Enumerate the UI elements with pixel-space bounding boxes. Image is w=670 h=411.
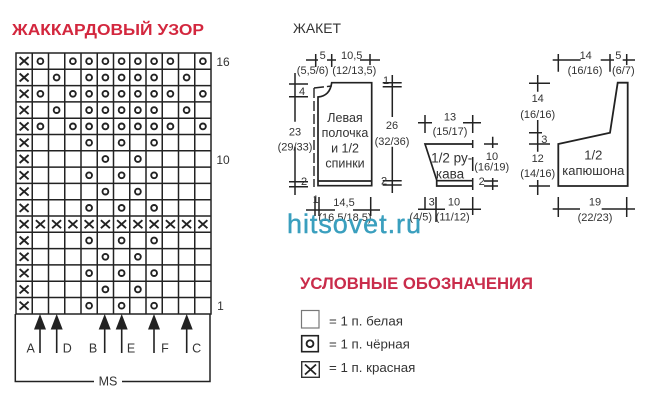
diagram: half hood: [520, 50, 635, 224]
panel dimension labels: 10,5: [341, 50, 362, 62]
hood dimension labels: (16/16): [520, 109, 555, 121]
panel dimension labels: 23: [289, 126, 301, 138]
panel dimensions: [289, 54, 402, 216]
hood dimension labels: 5: [615, 50, 621, 62]
panel label: и 1/2: [331, 142, 359, 156]
heading: legend: УСЛОВНЫЕ ОБОЗНАЧЕНИЯ: [300, 275, 533, 293]
arrows A-F: [27, 314, 201, 356]
sleeve dimension labels: 10: [486, 151, 498, 163]
watermark: hitsovet.ru: hitsovet.ru: [287, 209, 421, 239]
hood dimension labels: 14: [580, 50, 592, 62]
panel dimension labels: 5: [320, 50, 326, 62]
panel dimension labels: 1: [313, 194, 319, 206]
row numbers: 10: [216, 153, 230, 167]
MS bracket: MS: [99, 374, 117, 388]
grid lines: [16, 53, 211, 314]
arrows A-F: A: [27, 342, 36, 356]
hood dimension labels: 19: [589, 196, 601, 208]
hood label: 1/2: [584, 148, 602, 162]
fold line: [314, 86, 332, 187]
sleeve dimension labels: (16/19): [474, 162, 509, 174]
legend: white stitch: = 1 п. белая: [329, 314, 403, 328]
hood dimension labels: 3: [541, 134, 547, 146]
panel label: [322, 111, 368, 170]
panel dimension labels: (32/36): [375, 136, 409, 148]
chart: stitch grid: [16, 53, 211, 314]
title: jacquard pattern: ЖАККАРДОВЫЙ УЗОР: [11, 20, 204, 39]
panel dimension labels: 14,5: [333, 197, 355, 209]
sleeve dimension labels: (11/12): [436, 212, 470, 224]
hood dimension labels: (22/23): [578, 212, 612, 224]
panel dimension labels: 1: [383, 75, 389, 87]
hood dimension labels: (16/16): [568, 65, 602, 77]
sleeve dimensions: [418, 115, 498, 222]
panel dimension labels: 2: [381, 176, 387, 188]
arrows A-F: B: [89, 342, 97, 356]
arrows A-F: C: [192, 342, 201, 356]
front panel outline: [318, 83, 372, 186]
heading: jacket: ЖАКЕТ: [293, 21, 341, 36]
panel dimension labels: [278, 50, 409, 224]
hood dimension labels: (14/16): [520, 168, 555, 180]
diagram: left front and half back: [278, 50, 409, 224]
sleeve label: [431, 150, 472, 182]
sleeve dimension labels: 13: [444, 112, 456, 124]
hood label: капюшона: [562, 163, 625, 178]
panel dimension labels: 26: [386, 120, 398, 132]
panel dimension labels: 2: [301, 176, 307, 188]
sleeve dimension labels: (15/17): [433, 126, 467, 138]
arrows A-F: F: [161, 342, 169, 356]
panel dimension labels: (5,5/6): [297, 65, 329, 77]
sleeve dimension labels: 3: [429, 196, 435, 208]
MS bracket: [15, 314, 210, 388]
legend: [302, 310, 415, 377]
panel label: Левая: [327, 111, 363, 125]
sleeve label: 1/2 ру-: [431, 150, 472, 166]
sleeve fold line: [472, 140, 474, 190]
sleeve dimension labels: (4/5): [409, 212, 432, 224]
arrows A-F: E: [127, 342, 135, 356]
row numbers: 16: [216, 55, 230, 69]
hood dimension labels: [520, 50, 635, 224]
red stitch crosses: [20, 57, 207, 310]
hood dimensions: [529, 54, 635, 217]
sleeve label: кава: [436, 166, 465, 182]
sleeve dimension labels: 2: [479, 176, 485, 188]
panel dimension labels: (12/13,5): [332, 65, 376, 77]
row numbers: [216, 55, 230, 313]
row numbers: 1: [217, 299, 224, 313]
arrows A-F: D: [63, 342, 72, 356]
sleeve dimension labels: [409, 112, 509, 224]
hood dimension labels: (6/7): [612, 65, 635, 77]
sleeve dimension labels: 10: [448, 196, 460, 208]
black stitch circles: [38, 58, 206, 309]
hood dimension labels: 12: [532, 153, 544, 165]
legend: black stitch: = 1 п. чёрная: [329, 336, 410, 352]
panel dimension labels: (29/33): [278, 142, 312, 154]
diagram: half sleeve: [409, 112, 509, 224]
hood outline: [558, 83, 628, 186]
hood dimension labels: 14: [532, 93, 544, 105]
hood label: [562, 148, 625, 178]
panel label: спинки: [325, 156, 365, 170]
sleeve outline: [425, 144, 473, 186]
panel dimension labels: 4: [299, 86, 305, 98]
panel label: полочка: [322, 126, 368, 140]
panel dimension labels: (16,5/18,5): [318, 212, 372, 224]
legend: red stitch: = 1 п. красная: [329, 360, 415, 375]
